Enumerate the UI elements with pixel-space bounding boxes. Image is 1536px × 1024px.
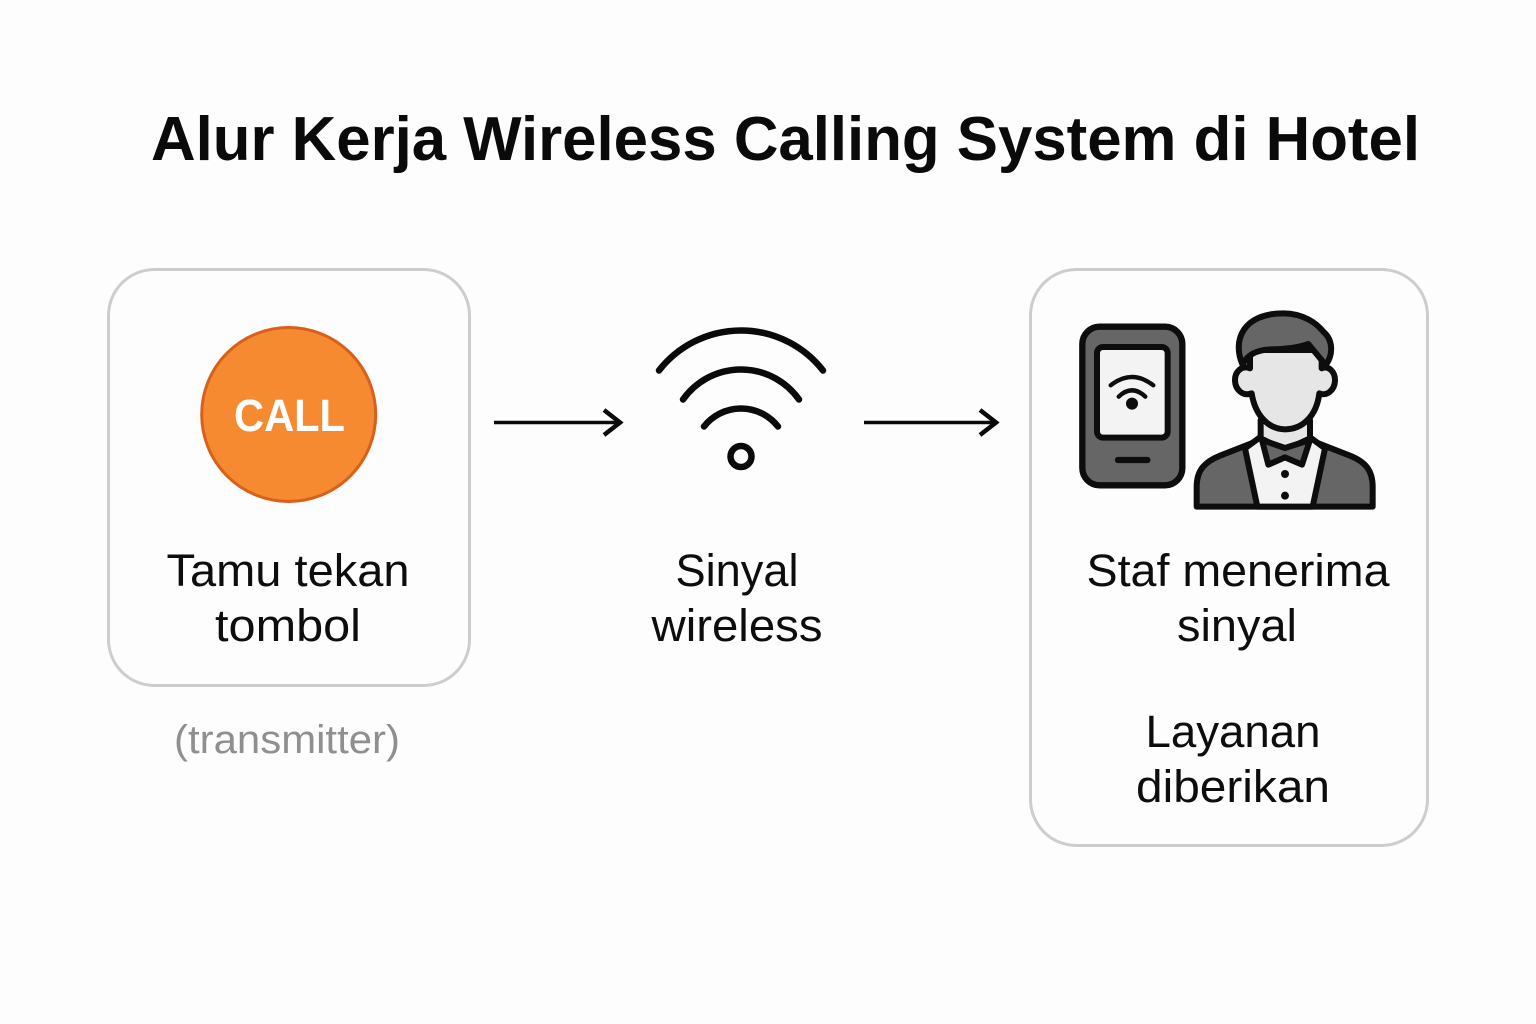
icon: hotel staff with bow tie [1197,313,1373,507]
arrow: signal to staff [864,410,996,435]
icon: wifi signal [659,330,823,467]
text: guest presses button [166,545,410,651]
text: staff receives signal: sinyal [1177,600,1297,651]
panel: guest presses button [108,270,470,686]
text: guest presses button: Tamu tekan [166,545,410,596]
icon: orange call button [202,328,376,502]
text: wireless signal: Sinyal [676,545,798,596]
icon: orange call button: CALL [234,390,345,441]
text: service delivered [1136,706,1330,812]
title: Alur Kerja Wireless Calling System di Hotel [151,105,1420,174]
text: staff receives signal: Staf menerima [1086,545,1390,596]
icon: receiver device [1082,327,1182,485]
text: staff receives signal [1086,545,1390,651]
text: wireless signal [650,545,822,651]
text: wireless signal: wireless [650,600,822,651]
caption: transmitter: (transmitter) [174,718,400,762]
panel: staff receives signal [1030,270,1428,846]
panel frame: staff [1030,270,1428,846]
text: guest presses button: tombol [215,600,361,651]
arrow: button to signal [494,410,620,435]
text: service delivered: Layanan [1146,706,1320,757]
panel frame: transmitter [108,270,470,686]
text: service delivered: diberikan [1136,761,1330,812]
